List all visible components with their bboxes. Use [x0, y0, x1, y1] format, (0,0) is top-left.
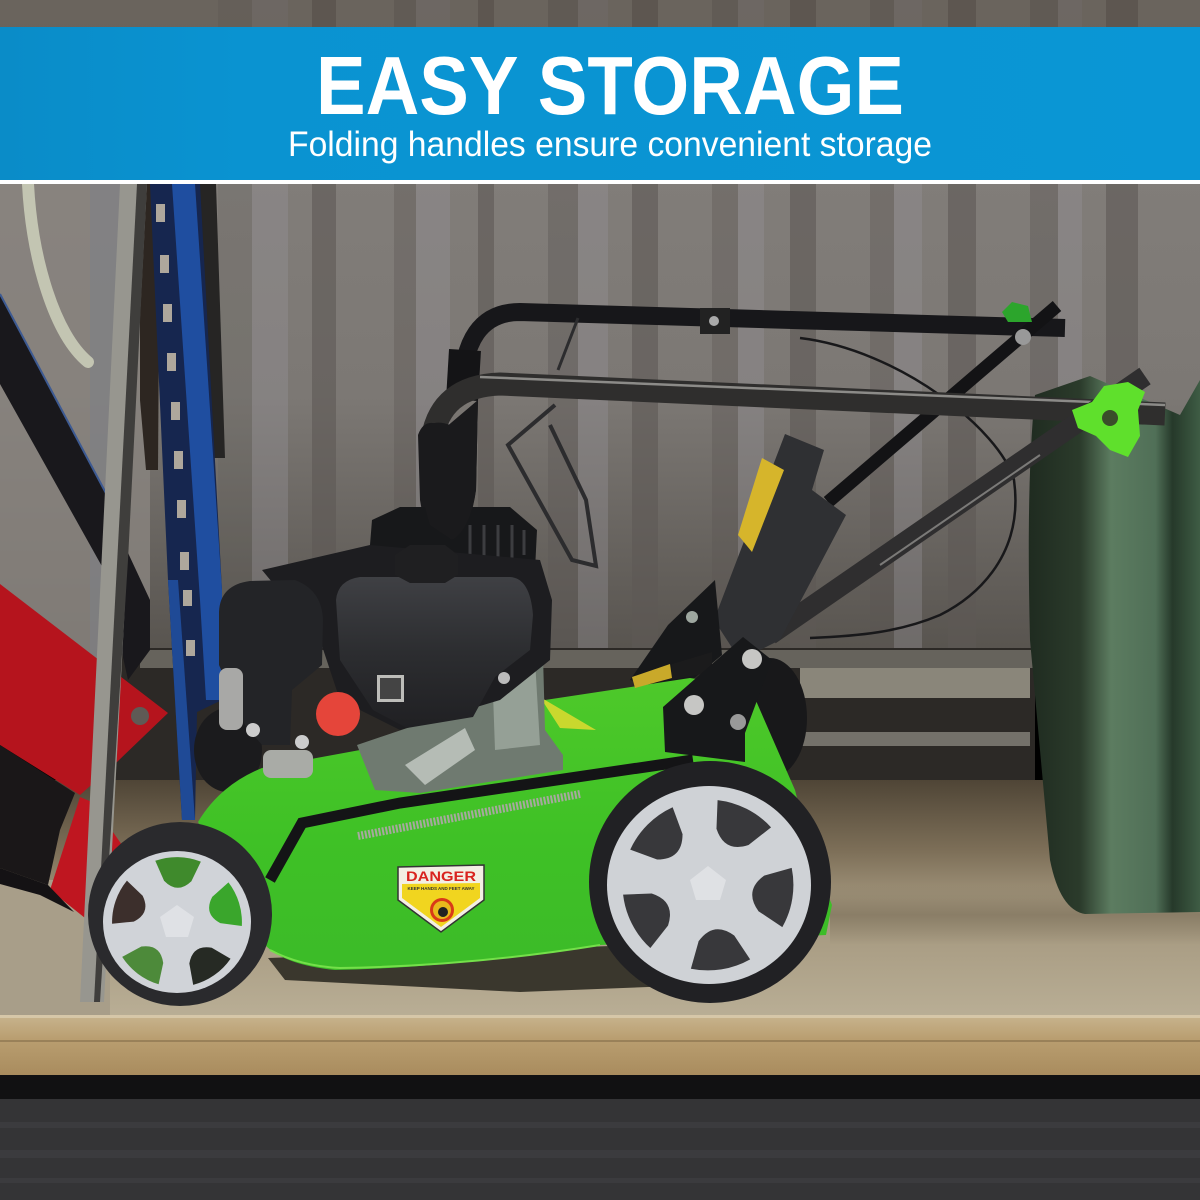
lawn mower: [88, 302, 1165, 1006]
metal ledge: [115, 648, 1035, 782]
cable and spring: [270, 760, 693, 880]
handle bracket: [663, 637, 772, 762]
large rear wheel: [589, 761, 831, 1003]
rear handle bars: [462, 302, 1065, 638]
small front wheel: [88, 822, 272, 1006]
items at left: racking, hose, pole, red machine: [0, 184, 225, 1002]
title: EASY STORAGE: [316, 39, 904, 132]
icon: green handle knob: [1072, 382, 1145, 457]
floor: [0, 780, 1200, 1016]
discharge chute: [630, 434, 846, 690]
danger label: DANGER: [406, 868, 476, 884]
banner: blue header: [0, 27, 1200, 184]
front handle: [418, 376, 1165, 635]
below shelf: [0, 1075, 1200, 1200]
engine: [219, 507, 563, 793]
shadow under mower: [268, 945, 700, 992]
deck: [198, 652, 832, 970]
danger label: [398, 865, 484, 932]
rear wheel behind: [194, 658, 807, 792]
subtitle: Folding handles ensure convenient storage: [288, 125, 932, 164]
danger label: KEEP HANDS AND FEET AWAY: [408, 886, 474, 891]
plank edge: [0, 1015, 1200, 1075]
fuel can: [1029, 376, 1200, 914]
grip over engine: [420, 400, 478, 540]
